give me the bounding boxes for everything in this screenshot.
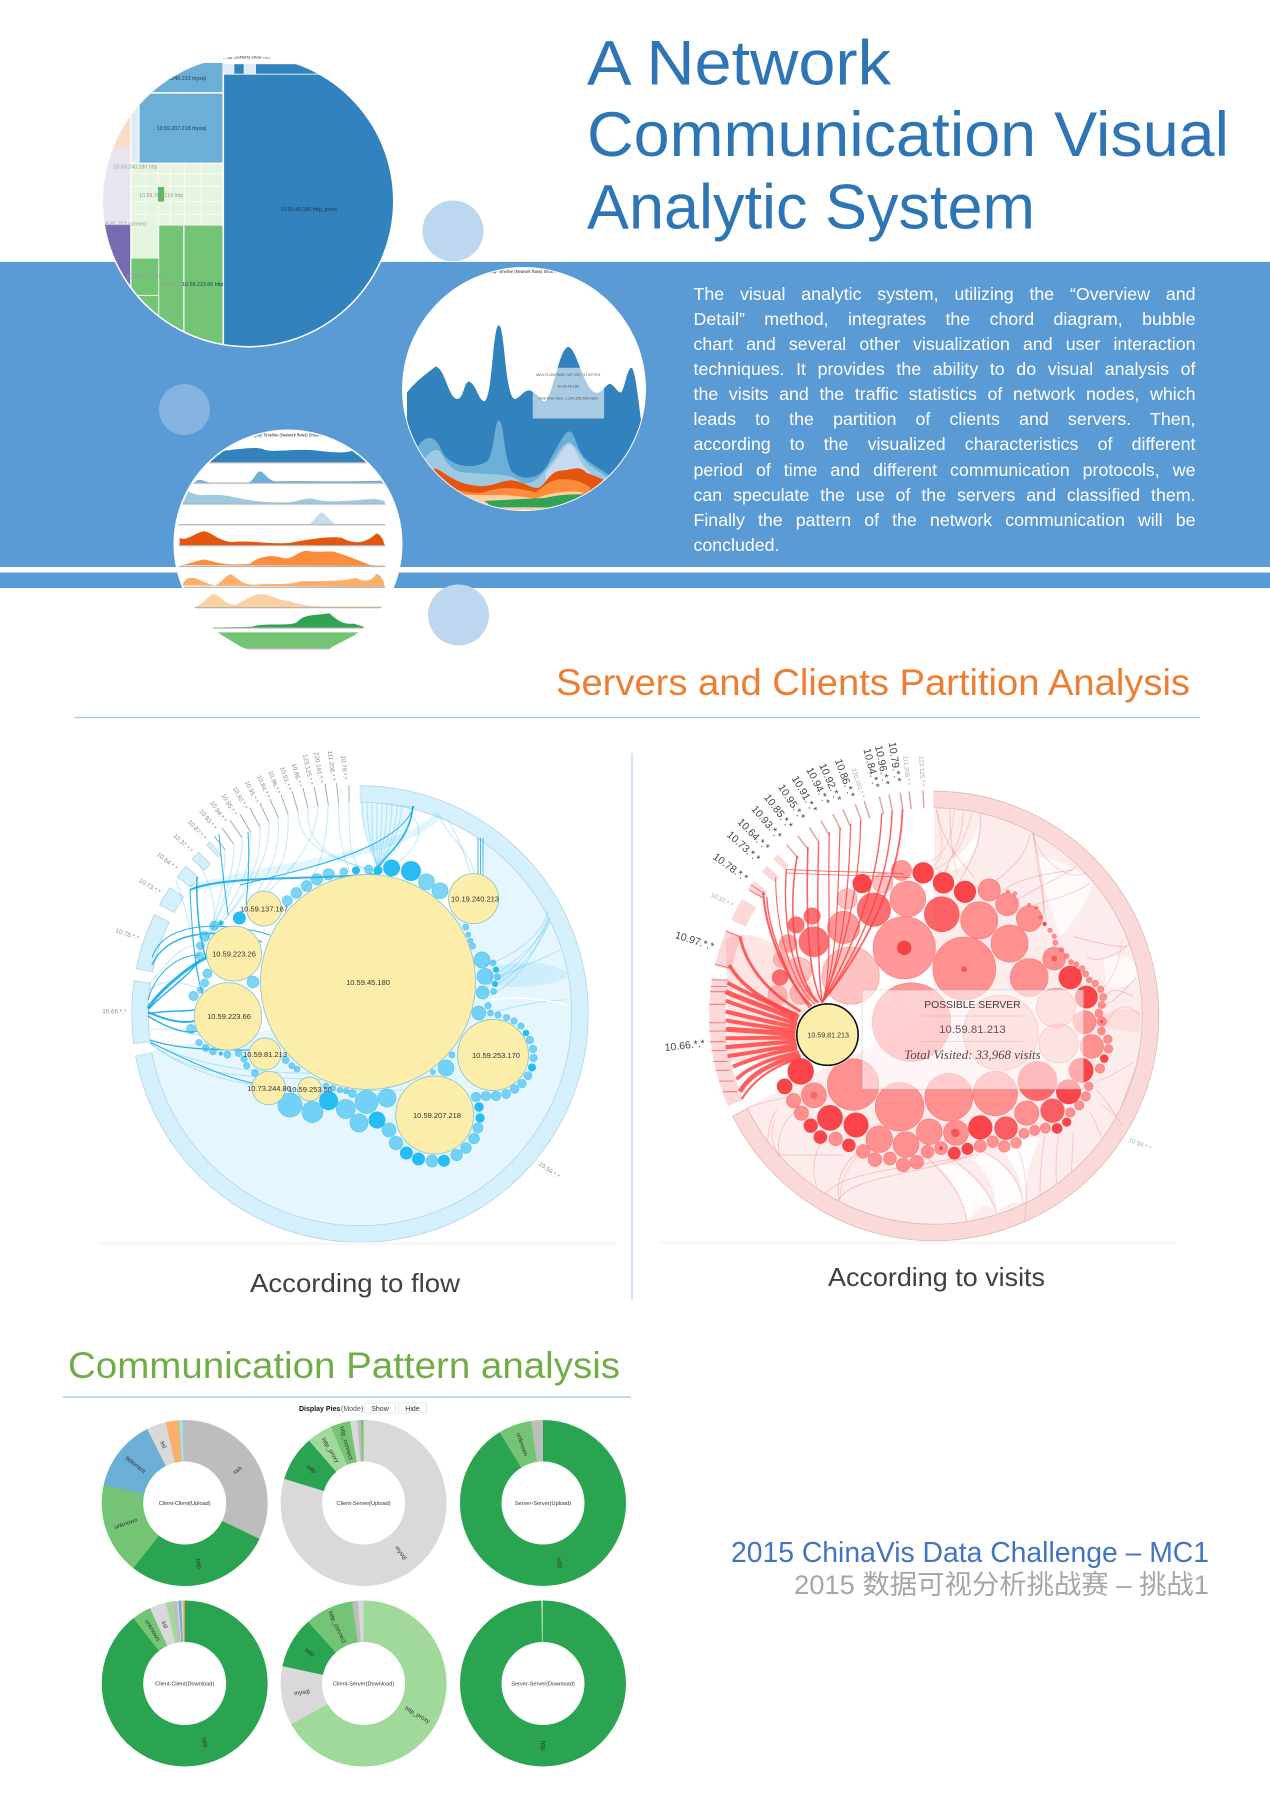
donut labels: client-server download: http_connect — [326, 1611, 347, 1645]
donut labels: client-server download — [294, 1611, 431, 1725]
tooltip: possible server: POSSIBLE SERVER — [924, 1000, 1021, 1011]
header band — [0, 262, 1270, 588]
donut: server-server upload — [458, 1418, 628, 1588]
bubble labels: 10.59.137.187 — [240, 904, 288, 914]
donut labels: client-client download — [143, 1619, 214, 1749]
icon: stream graph circle — [402, 267, 646, 520]
donut labels: client-server upload: http_proxy — [320, 1437, 340, 1464]
segments — [628, 710, 1240, 1322]
bubble labels: 10.59.207.218 — [413, 1111, 461, 1120]
upper ribbon whites and chords — [937, 810, 1138, 1007]
intro paragraph: concluded. — [694, 535, 780, 555]
bubble labels: 10.59.253.56 — [288, 1085, 332, 1094]
intro paragraph: chart and several other visualization and user interaction — [694, 334, 1196, 354]
donut labels: client-server download: http — [303, 1648, 316, 1659]
donut labels: client-client download: Client-Client(Download) — [155, 1682, 214, 1688]
subnet labels: 10.95.*.* — [775, 782, 807, 822]
yellow server bubbles — [194, 874, 529, 1154]
decorative bubble on band — [159, 384, 210, 435]
icon: treemap circle: 10.59.81.213 http — [126, 274, 168, 280]
subnet labels: 10.87.*.* — [186, 819, 208, 842]
icon: treemap circle: Display Treemap (Servers) Show Hide Flow Size — [202, 54, 290, 60]
donut labels: client-server upload: mysql — [393, 1545, 407, 1561]
tick chords — [726, 810, 911, 1099]
subnet labels: 10.96.*.* — [872, 744, 892, 786]
ticks — [214, 783, 349, 850]
subnet labels: 10.79.*.* — [339, 755, 348, 780]
lower ribbon whites and chords — [768, 1057, 1140, 1222]
donut labels: client-server download: http_proxy — [403, 1706, 431, 1725]
subnet labels: 10.85.*.* — [219, 793, 238, 817]
subnet labels: 10.92.*.* — [231, 786, 249, 811]
subnet labels: 111.206.*.* — [326, 750, 336, 782]
donut labels: client-client upload: unknown — [114, 1517, 139, 1531]
heading: servers and clients: Servers and Clients Partition Analysis — [556, 661, 1190, 703]
dark bubbles — [772, 862, 1109, 1160]
donut labels: client-client download: http — [200, 1737, 209, 1749]
highlighted server bubble: 10.59.81.213 — [807, 1031, 849, 1039]
donut labels: server-server upload: unknown — [514, 1432, 528, 1457]
donut labels: client-client upload: ssh — [232, 1466, 244, 1476]
bubble labels: 10.19.240.213 — [451, 894, 499, 904]
subnet labels: 10.86.*.* — [290, 763, 303, 788]
donut labels: client-client upload: bittorrent — [124, 1456, 146, 1475]
tooltip: possible server — [862, 990, 1084, 1089]
small subnet labels: 10.37.*.* — [709, 891, 734, 909]
heading: communication pattern: Communication Pattern analysis — [68, 1344, 620, 1386]
subnet labels: 10.91.*.* — [789, 774, 820, 815]
main arc — [717, 799, 1151, 1233]
donut labels: server-server upload — [514, 1432, 571, 1570]
main arc — [140, 794, 580, 1234]
icon: treemap circle: 10.59.81.213 connect — [96, 221, 147, 228]
icon: treemap circle: 10.59.207.218 mysql — [157, 126, 206, 132]
donut labels: server-server upload: http — [554, 1558, 563, 1570]
pale chords — [148, 802, 566, 1091]
normal bubbles — [786, 860, 1113, 1172]
small subnet labels — [709, 755, 1153, 1152]
subnet labels: 10.79.*.* — [886, 741, 904, 783]
donut labels: client-server download: Client-Server(Download) — [333, 1682, 394, 1688]
donut labels: client-client download: unknown — [143, 1619, 161, 1643]
subnet labels: 10.92.*.* — [816, 762, 844, 803]
subnet labels: 10.84.*.* — [255, 774, 271, 800]
challenge label english: 2015 ChinaVis Data Challenge – MC1 — [731, 1537, 1209, 1569]
donut labels: client-server upload — [305, 1426, 407, 1561]
pale thin chords — [736, 810, 1140, 1222]
decorative bubble lower — [428, 584, 489, 646]
chart: chord bubble according to visits — [628, 710, 1240, 1322]
donut: client-client upload — [97, 1415, 272, 1591]
icon: stream graph circle: 10.59.45.180 — [558, 384, 579, 388]
donut labels: client-client upload: ssl — [158, 1440, 167, 1449]
donut labels: client-client download: ssl — [160, 1620, 168, 1629]
intro paragraph: according to the visualized characteristics of different — [694, 434, 1196, 454]
small subnet labels: 123.125.*.* — [917, 756, 926, 787]
subnet labels: 10.73.*.* — [724, 829, 762, 865]
intro paragraph: techniques. It provides the ability to do visual analysis of — [694, 359, 1196, 379]
radial ticks — [787, 790, 924, 858]
intro paragraph — [694, 284, 1196, 555]
decorative bubble upper — [422, 200, 484, 262]
pie display toolbar: Show — [371, 1406, 390, 1413]
intro paragraph: Finally the pattern of the network communication will be — [694, 510, 1196, 530]
pie display toolbar: Display Pies — [299, 1406, 340, 1413]
caption: according to visits: According to visits — [828, 1262, 1045, 1292]
intro paragraph: Detail” method, integrates the chord diagram, bubble — [694, 309, 1196, 329]
title — [587, 28, 1229, 242]
title: Communication Visual — [587, 100, 1229, 170]
icon: treemap circle: 10.59.45.180 http_proxy — [280, 207, 338, 213]
highlighted server bubble — [795, 1002, 860, 1067]
icon: treemap circle: 59.223.26 — [160, 282, 184, 288]
light bubbles — [186, 865, 537, 1167]
chart: chord bubble according to flow — [49, 703, 671, 1325]
subnet labels: 10.64.*.* — [155, 851, 179, 872]
bubble labels: 10.59.223.66 — [207, 1012, 251, 1021]
subnet labels: 10.84.*.* — [860, 747, 882, 789]
subnet labels: 220.161.*.* — [312, 752, 324, 784]
donut labels: client-server upload: http — [305, 1465, 317, 1476]
subnet labels: 10.86.*.* — [832, 757, 857, 799]
bubble labels: 10.59.45.180 — [346, 978, 390, 987]
icon: treemap circle — [96, 54, 400, 352]
subnet labels: 10.95.*.* — [243, 780, 260, 805]
icon: small multiples circle: Display Timeline (Network flows) Show Hide — [249, 432, 329, 437]
subnet labels: 123.125.*.* — [301, 754, 314, 786]
tooltip: possible server: 10.59.81.213 — [939, 1024, 1006, 1036]
bubble labels: 10.73.244.80 — [247, 1084, 291, 1093]
subnet labels: 10.93.*.* — [749, 803, 784, 842]
icon: stream graph circle: Total Flow Size: 1,234,195,296 bytes — [538, 396, 598, 400]
dark bubbles — [218, 860, 536, 1167]
donut: client-server download — [276, 1596, 451, 1771]
subnet labels: 10.66.*.* — [664, 1038, 705, 1054]
inner disc — [151, 838, 572, 1226]
intro paragraph: can speculate the use of the servers and classified them. — [694, 485, 1196, 505]
intro paragraph: period of time and different communication protocols, we — [694, 460, 1196, 480]
donut labels: server-server download — [511, 1682, 575, 1751]
intro paragraph: the visits and the traffic statistics of network nodes, which — [694, 384, 1196, 404]
donut labels: server-server upload: Server-Server(Upload) — [515, 1501, 571, 1507]
segment stripes — [709, 885, 766, 1092]
subnet labels — [664, 741, 904, 1054]
pie display toolbar: Hide — [405, 1406, 420, 1413]
bubble labels — [207, 894, 520, 1120]
subnet labels: 10.37.*.* — [172, 833, 194, 855]
small subnet labels: 220.161.*.* — [850, 768, 866, 799]
icon: small multiples circle — [174, 430, 402, 658]
intro paragraph: leads to the partition of clients and servers. Then, — [694, 409, 1196, 429]
challenge label chinese: 2015 数据可视分析挑战赛 – 挑战1 — [794, 1570, 1209, 1600]
donut labels: client-server upload: http_connect — [338, 1426, 353, 1461]
subnet labels: 10.93.*.* — [197, 808, 218, 832]
donut labels: client-server download: mysql — [294, 1689, 310, 1697]
bubble labels: 10.59.223.26 — [212, 950, 256, 958]
subnet labels: 10.97.*.* — [673, 929, 715, 953]
donut labels: server-server download: http — [539, 1741, 545, 1751]
subnet labels: 10.66.*.* — [102, 1008, 127, 1016]
small subnet labels: 10.59.*.* — [1127, 1137, 1153, 1152]
pie display toolbar: (Mode) — [341, 1406, 363, 1413]
small subnet labels: 111.206.*.* — [901, 755, 912, 786]
subnet labels: 10.96.*.* — [266, 770, 281, 796]
inner disc — [747, 808, 1142, 1224]
donut: server-server download — [480, 1620, 606, 1747]
intro paragraph: The visual analytic system, utilizing the “Overview and — [694, 284, 1196, 304]
strong chords — [148, 806, 483, 1085]
icon: treemap circle: 10.59.223.66 http — [182, 282, 224, 288]
subnet labels: 10.59.*.* — [537, 1161, 561, 1181]
donut labels: client-client upload: http — [194, 1558, 202, 1570]
donut labels: client-client upload: Client-Client(Upload) — [159, 1501, 211, 1507]
icon: stream graph circle: Display Timeline (Network flows) Show Hide — [483, 269, 564, 274]
tooltip: possible server: Total Visited: 33,968 visits — [904, 1048, 1041, 1062]
subnet labels: 10.94.*.* — [208, 800, 228, 824]
caption: according to flow: According to flow — [250, 1268, 460, 1298]
icon: stream graph circle: MAX FLOW SIZE: 407,199,717 BYTES — [536, 373, 601, 377]
subnet labels: 10.85.*.* — [761, 792, 795, 831]
donut labels: server-server download: Server-Server(Download) — [511, 1682, 575, 1688]
white chord streaks — [490, 998, 570, 1006]
bubble labels: 10.59.253.170 — [472, 1051, 520, 1060]
pale ribbons — [726, 935, 1140, 1061]
subnet labels — [102, 750, 561, 1181]
bubble labels: 10.59.81.213 — [243, 1050, 287, 1059]
donut: client-server upload — [276, 1415, 451, 1591]
icon: treemap circle: 10.19.240.213 mysql — [157, 76, 206, 82]
icon: treemap circle: 10.59.207.218 http — [139, 193, 183, 199]
pale bubbles — [768, 873, 893, 1005]
subnet labels: 10.94.*.* — [803, 765, 832, 807]
subnet labels: 10.64.*.* — [735, 816, 772, 853]
pie display toolbar — [299, 1403, 426, 1413]
subnet labels: 10.78.*.* — [711, 851, 750, 884]
title: A Network — [587, 28, 892, 98]
title: Analytic System — [587, 172, 1035, 242]
subnet labels: 10.73.*.* — [137, 877, 162, 896]
segments — [49, 703, 671, 1325]
subnet labels: 10.91.*.* — [278, 766, 292, 792]
pale chord ribbons — [190, 803, 567, 987]
subnet labels: 10.78.*.* — [115, 928, 140, 942]
donut labels: client-client upload — [114, 1440, 244, 1570]
donut: client-client download — [97, 1596, 272, 1771]
icon: treemap circle: 10.59.240.180 http — [113, 164, 158, 170]
donut labels: client-server upload: Client-Server(Upload) — [337, 1501, 391, 1507]
